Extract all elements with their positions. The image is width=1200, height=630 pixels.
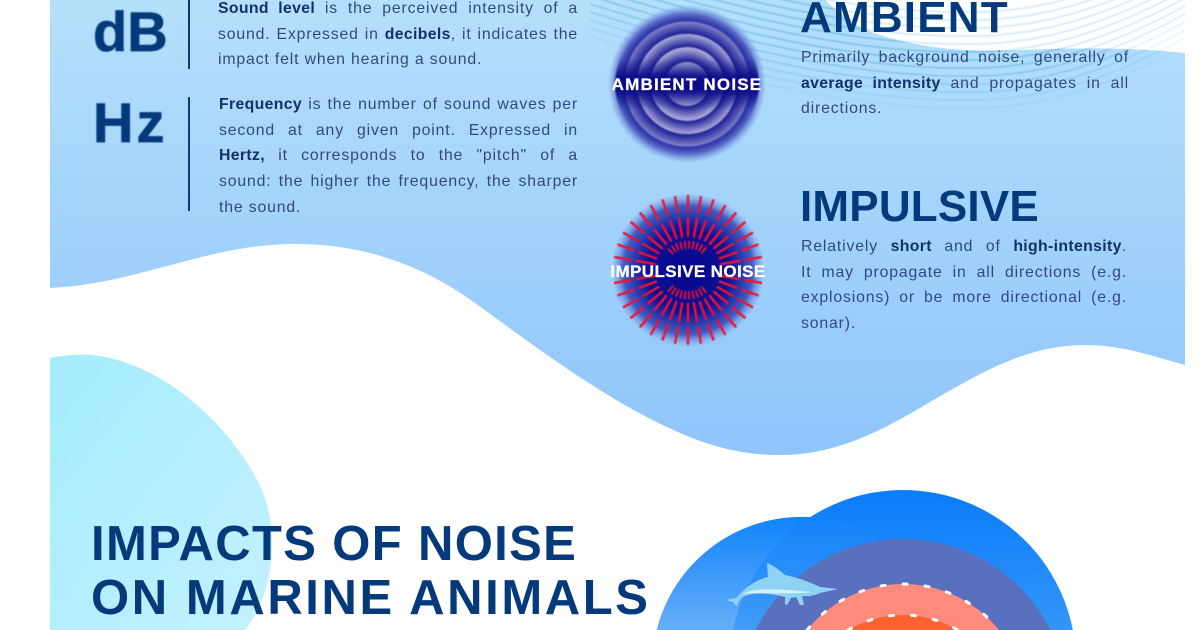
icon: impulsive noise bbox=[610, 194, 766, 346]
text block: sound level: sound. Expressed in decibels, it indicates the bbox=[218, 26, 578, 43]
text block: impulsive bbox=[801, 238, 1127, 332]
icon: ambient noise bbox=[609, 6, 765, 162]
divider rule: Hz bbox=[188, 97, 190, 211]
text block: ambient: Primarily background noise, generally of bbox=[801, 49, 1129, 66]
white top right wave bbox=[825, 0, 1185, 53]
white wash over wave lines bbox=[825, 0, 1185, 53]
title bbox=[91, 517, 651, 625]
text block: frequency: sound: the higher the frequency, the sharper bbox=[219, 173, 578, 190]
text block: frequency: second at any given point. Expressed in bbox=[219, 122, 578, 139]
cyan circle bbox=[50, 355, 272, 630]
text block: frequency: Frequency is the number of sound waves per bbox=[219, 96, 578, 113]
text block: impulsive: sonar). bbox=[801, 315, 856, 332]
text block: impulsive: Relatively short and of high-intensity. bbox=[801, 238, 1127, 255]
text block: frequency: Hertz, it corresponds to the "pitch" of a bbox=[219, 147, 578, 164]
unit: Hz: Hz bbox=[93, 91, 167, 154]
text block: impulsive: explosions) or be more directional (e.g. bbox=[801, 289, 1127, 306]
text block: ambient: directions. bbox=[801, 100, 882, 117]
text block: ambient bbox=[801, 49, 1129, 117]
title: IMPACTS OF NOISE bbox=[91, 517, 577, 571]
text block: frequency: the sound. bbox=[219, 199, 301, 216]
icon: dolphin bbox=[726, 563, 838, 607]
text block: frequency bbox=[219, 96, 578, 216]
text block: impulsive: It may propagate in all directions (e.g. bbox=[801, 264, 1127, 281]
sea shape bbox=[50, 0, 1185, 455]
unit: dB: dB bbox=[93, 0, 168, 63]
text block: ambient: average intensity and propagates in all bbox=[801, 75, 1129, 92]
text block: sound level bbox=[218, 0, 578, 68]
concentric impact zones chart bbox=[657, 490, 1073, 630]
divider rule: dB bbox=[188, 0, 190, 69]
text block: sound level: Sound level is the perceived intensity of a bbox=[218, 0, 578, 17]
text block: sound level: impact felt when hearing a sound. bbox=[218, 51, 482, 68]
heading: impulsive: IMPULSIVE bbox=[800, 182, 1039, 231]
title: ON MARINE ANIMALS bbox=[91, 571, 651, 625]
wave lines bbox=[590, 0, 1185, 108]
icon: ambient noise: AMBIENT NOISE bbox=[612, 75, 762, 94]
icon: impulsive noise: IMPULSIVE NOISE bbox=[610, 262, 766, 281]
